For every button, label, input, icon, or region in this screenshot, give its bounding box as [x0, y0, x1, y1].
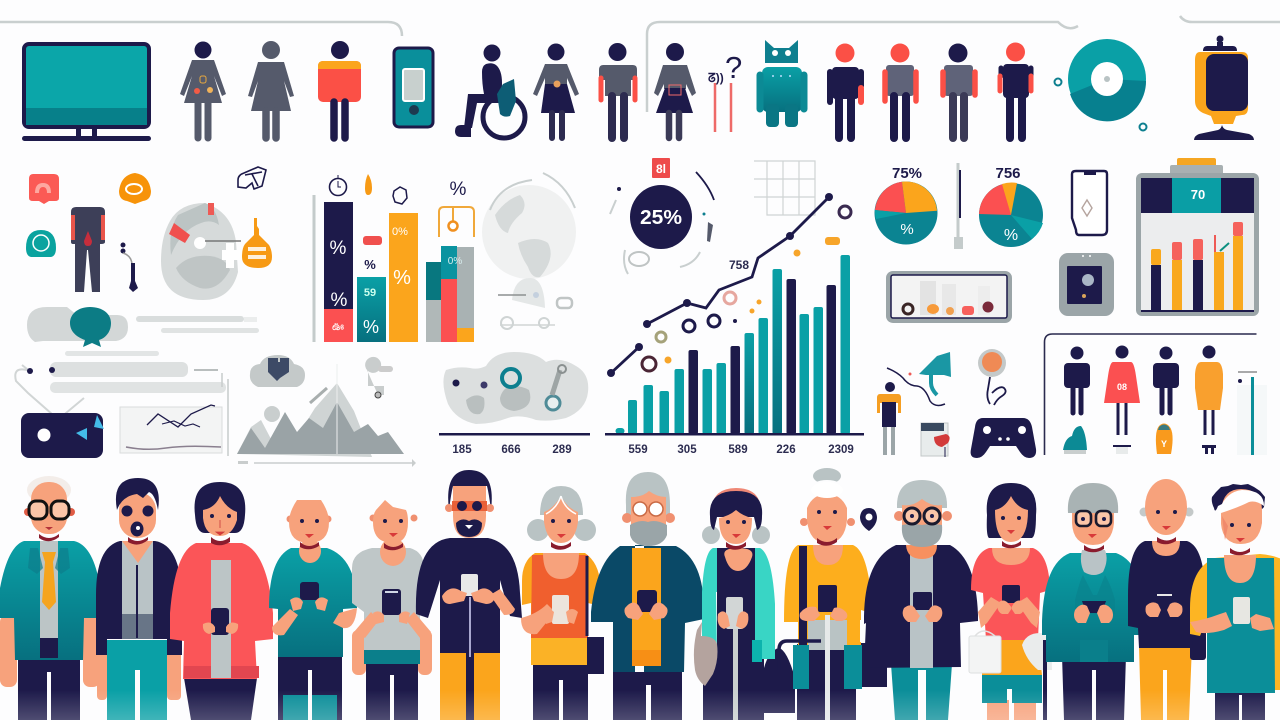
chart grid — [754, 161, 815, 215]
bar chart: percentage bars: % — [450, 179, 467, 200]
person 5: man gray shirt — [352, 500, 432, 720]
icon: television — [22, 44, 151, 141]
icon: orange bag: Y — [1161, 439, 1167, 449]
icon: small worker — [877, 382, 901, 455]
icon: woman pictogram with bag — [654, 43, 696, 138]
chart axis labels: 559 — [628, 444, 648, 456]
icon: teal pin — [26, 230, 56, 257]
icon: game controller — [971, 418, 1036, 458]
icon: man pictogram red sleeves — [599, 43, 637, 138]
icon: gift with rose — [921, 423, 950, 457]
person 11: older man with round glasses — [864, 480, 978, 720]
icon: vertical stylus — [954, 163, 963, 249]
person 13: older woman in teal sweater — [1042, 483, 1146, 720]
icon: megaphone with cable — [887, 352, 951, 405]
icon: globe — [482, 173, 576, 329]
panel: dashboard: 70 — [1191, 187, 1205, 202]
pie chart: 75% — [874, 165, 938, 244]
bar chart: percentage bars: % — [364, 257, 376, 272]
person 7: gray-haired woman — [521, 486, 604, 720]
icon: orange pin — [119, 173, 151, 204]
icon: person with orange and red jacket — [318, 41, 361, 138]
icon: gray device — [1059, 253, 1114, 316]
bar chart: percentage bars: % — [363, 317, 379, 337]
icon: speech bubbles — [27, 307, 128, 347]
icon: cloud with shield — [250, 355, 305, 387]
icon: woman pictogram navy skirt — [533, 44, 579, 138]
icon: body figure — [71, 207, 105, 292]
icon: 25% circle badge: 8l — [656, 162, 666, 176]
chart axis with labels — [439, 433, 590, 456]
icon: wheelchair user — [455, 44, 525, 138]
bar chart: percentage bars: % — [393, 267, 411, 289]
chart axis labels — [628, 444, 854, 456]
icon: canes and question mark — [708, 50, 742, 132]
icon: dark media box with antenna — [15, 365, 104, 458]
chart axis labels: 589 — [728, 444, 748, 456]
bar chart: percentage bars: 0% — [448, 256, 462, 267]
icon: phone outline — [1072, 171, 1107, 235]
person 1: older man with tie — [0, 476, 100, 720]
icon: man pictogram gray shirt red arms — [885, 44, 916, 138]
person 9: woman with headphones and cane — [694, 488, 795, 720]
pie chart: 756: 756 — [995, 165, 1021, 182]
icon: teal robot cat — [760, 40, 804, 127]
bar chart: percentage bars: % — [331, 290, 348, 311]
bar chart: percentage bars: % — [330, 238, 347, 259]
icon: red pin — [29, 174, 59, 204]
panel: people row — [0, 468, 1280, 720]
line chart: trend over bars: 758 — [729, 258, 749, 272]
person 12: woman in red shirt with bags — [969, 483, 1052, 720]
icon: man pictogram navy red arms — [1000, 42, 1031, 138]
bar chart: percentage bars: 59 — [364, 287, 376, 299]
chart axis labels: 2309 — [828, 444, 854, 456]
chart axis with labels: 289 — [552, 444, 572, 456]
chart axis labels: 305 — [677, 444, 697, 456]
icon: man pictogram navy head gray legs — [943, 44, 975, 138]
person 14: bald man with orange pants — [1128, 479, 1206, 720]
person 4: bald man teal shirt — [269, 500, 357, 720]
pie chart: 756 — [979, 165, 1043, 247]
icon: orange bag — [1156, 424, 1173, 454]
panel: audience figures — [1044, 334, 1256, 455]
icon: teal seat — [1063, 426, 1087, 454]
person 8: bearded older man in dark jacket — [591, 472, 704, 720]
pie chart: 75%: % — [900, 221, 914, 238]
chart axis with labels: 666 — [501, 444, 521, 456]
icon: man pictogram navy red head — [830, 44, 861, 138]
chart: mountain area — [237, 357, 416, 467]
icon: small probe — [120, 242, 138, 292]
person 3: woman in red cardigan — [170, 482, 273, 720]
icon: woman in red dress: 08 — [1117, 382, 1127, 392]
icon: 25% circle badge — [610, 158, 714, 274]
line chart: trend over bars — [607, 193, 851, 377]
icon: orange smartwatch device — [1194, 36, 1254, 140]
person 6: bearded man orange pants — [416, 470, 522, 720]
bar chart: percentage bars — [314, 174, 474, 342]
icon: balloon — [978, 349, 1006, 405]
line chart: small sketch — [120, 373, 228, 456]
icon: 25% circle badge: 25% — [640, 207, 682, 229]
panel: dashboard — [1136, 158, 1259, 316]
icon: woman pictogram gray — [248, 41, 294, 138]
panel: tablet — [886, 271, 1012, 323]
chart axis with labels: 185 — [452, 444, 472, 456]
bar chart: main teal and navy bars — [605, 255, 864, 436]
person 15: woman with white hair in teal tank — [1190, 484, 1280, 720]
bar chart: percentage bars: ఊ — [332, 321, 344, 333]
panel: health icons — [26, 173, 151, 292]
icon: person in orange — [1195, 346, 1223, 435]
icon: teal pole — [1237, 372, 1267, 455]
icon: gray helmet with orange bottle — [161, 203, 272, 300]
icon: canes and question mark: ? — [725, 50, 742, 85]
icon: woman pictogram with badges — [180, 42, 226, 138]
icon: gray blob map — [443, 352, 588, 424]
icon: smartphone — [394, 48, 433, 127]
icon: canes and question mark: ᘔ)) — [708, 71, 724, 85]
text block: placeholder lines — [50, 316, 259, 393]
icon: small stands — [1113, 445, 1216, 454]
person 10: woman in yellow with luggage — [779, 468, 887, 720]
chart axis labels: 226 — [776, 444, 796, 456]
icon: man figure — [1064, 346, 1090, 413]
icon: outlined box sketch — [238, 167, 266, 189]
pie chart: 75%: 75% — [892, 165, 922, 182]
icon: teal disc — [1054, 39, 1146, 130]
pie chart: 756: % — [1004, 227, 1018, 244]
icon: man figure second — [1153, 346, 1179, 413]
bar chart: percentage bars: 0% — [392, 226, 408, 238]
icon: woman in red dress — [1104, 346, 1140, 435]
person 2: man with sunglasses — [96, 478, 182, 720]
